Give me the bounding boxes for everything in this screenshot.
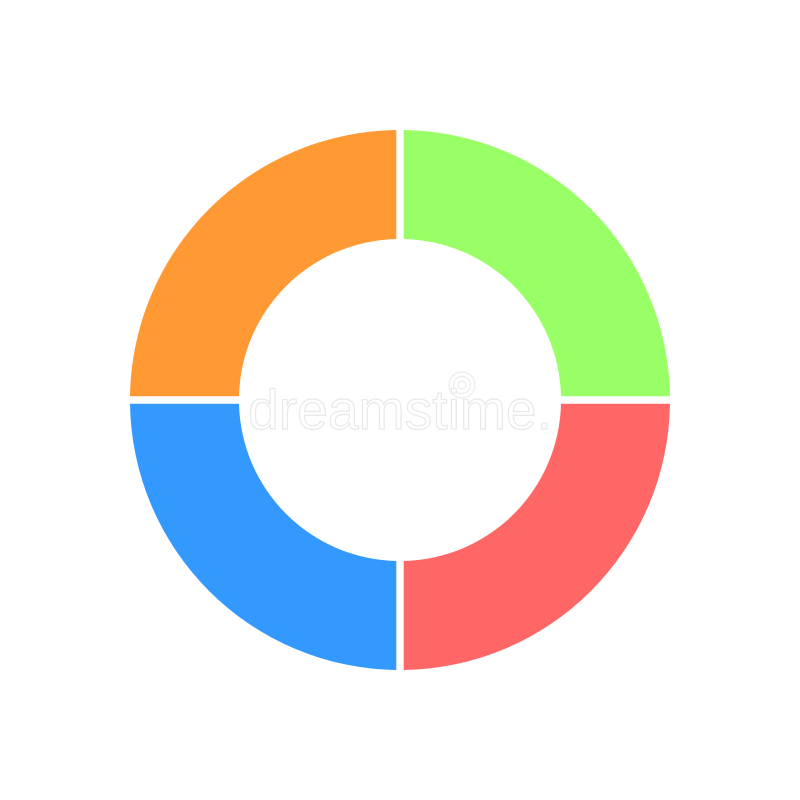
donut chart (130, 130, 670, 670)
segment: red bottom right (404, 404, 670, 670)
watermark icon: spiral (449, 372, 475, 398)
segment: orange top left (130, 130, 396, 396)
segment: green top right (404, 130, 670, 396)
segment: blue bottom left (130, 404, 396, 670)
watermark text: dreamstime. (248, 378, 552, 441)
watermark (248, 372, 552, 441)
